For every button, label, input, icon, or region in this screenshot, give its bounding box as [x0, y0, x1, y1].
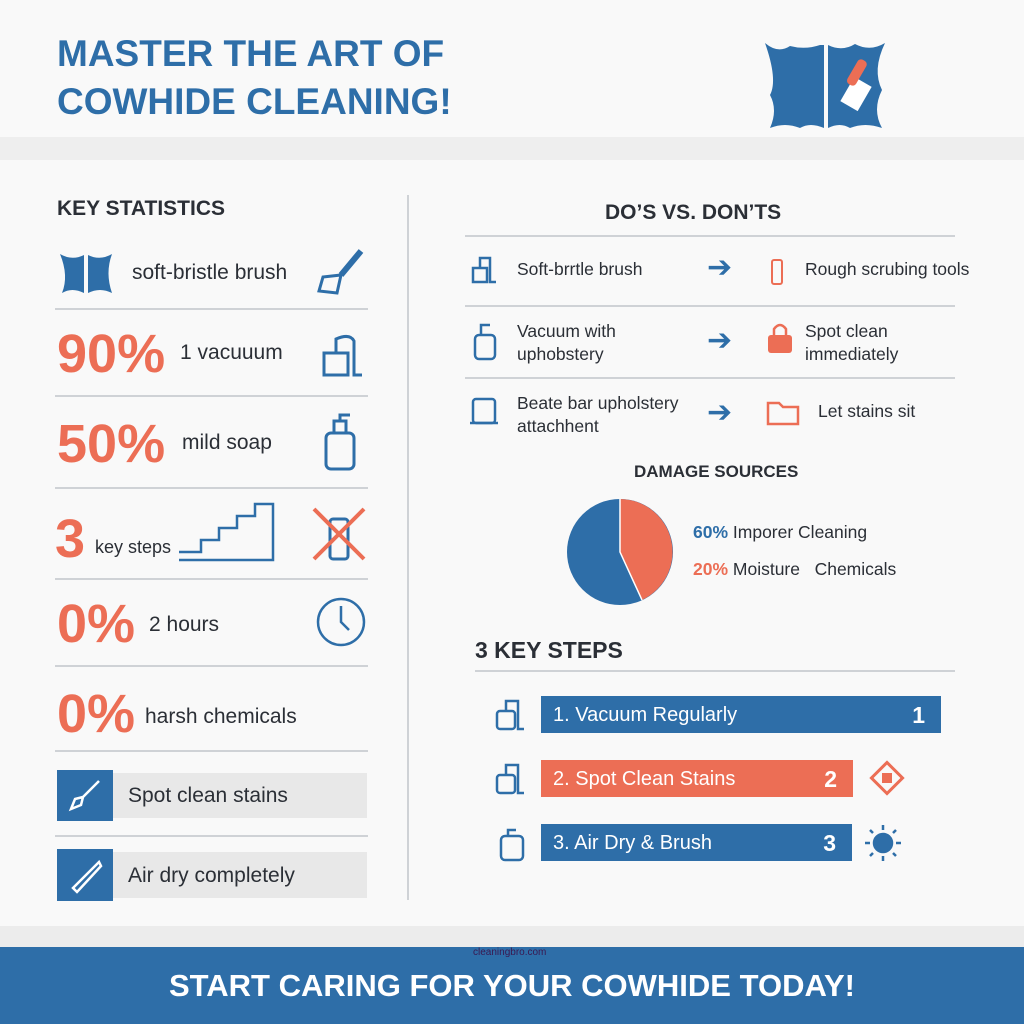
- panel: do's vs don'ts: [465, 201, 969, 436]
- watermark: cleaningbro.com: [473, 947, 546, 958]
- pie chart: [567, 499, 673, 605]
- row 1: [60, 249, 364, 295]
- row 2: Vacuum with: [517, 321, 616, 341]
- row 3: 50%: [57, 414, 165, 474]
- row 4: key steps: [95, 537, 171, 557]
- pie legend: 60% Imporer Cleaning: [693, 522, 867, 542]
- box: air dry completely: [57, 852, 367, 898]
- row 3: ➔: [707, 396, 732, 429]
- header title: [57, 33, 452, 122]
- footer text: START CARING FOR YOUR COWHIDE TODAY!: [169, 968, 855, 1003]
- step 3: [500, 824, 901, 862]
- row 2: immediately: [805, 344, 898, 364]
- step 1: [496, 696, 941, 733]
- row 2: 1 vacuuum: [180, 341, 283, 364]
- step 2: [496, 760, 905, 797]
- row 6: harsh chemicals: [145, 705, 297, 728]
- row 2: ➔: [707, 324, 732, 357]
- step 1: 1. Vacuum Regularly: [553, 704, 737, 726]
- pie legend: 20% Moisture Chemicals: [693, 559, 896, 579]
- gray band: [0, 137, 1024, 160]
- row 3: mild soap: [182, 431, 272, 454]
- row 2: 90%: [57, 324, 165, 384]
- row 5: 2 hours: [149, 613, 219, 636]
- heading 3 key steps: 3 KEY STEPS: [475, 637, 623, 663]
- row 3: [470, 393, 916, 436]
- row 3: Beate bar upholstery: [517, 393, 678, 413]
- step 2: 2. Spot Clean Stains: [553, 768, 735, 790]
- row 2: Spot clean: [805, 321, 888, 341]
- icon: cowhide with brush: [765, 43, 885, 128]
- box: spot clean stains: [57, 773, 367, 818]
- header title: COWHIDE CLEANING!: [57, 81, 452, 122]
- divider: [407, 195, 408, 900]
- damage sources heading: DAMAGE SOURCES: [634, 462, 798, 481]
- row 1: Rough scrubing tools: [805, 259, 969, 279]
- pie legend: [693, 522, 896, 579]
- row 3: attachhent: [517, 416, 599, 436]
- step 3: 3: [823, 830, 836, 856]
- box: air dry completely: Air dry completely: [128, 864, 295, 887]
- row 6: [57, 684, 297, 744]
- row 3: [57, 414, 356, 474]
- panel: key statistics: [55, 197, 368, 901]
- row 2: [474, 321, 898, 364]
- step 1: 1: [912, 702, 925, 728]
- footer banner: [0, 947, 1024, 1024]
- row 1: soft-bristle brush: [132, 261, 287, 284]
- row 1: ➔: [707, 251, 732, 284]
- row 2: uphobstery: [517, 344, 604, 364]
- row 4: 3: [55, 509, 85, 569]
- row 2: [57, 324, 362, 384]
- row 3: Let stains sit: [818, 401, 915, 421]
- step 2: 2: [824, 766, 837, 792]
- row 5: [57, 594, 366, 654]
- footer gray band: [0, 926, 1024, 947]
- heading key statistics: KEY STATISTICS: [57, 197, 225, 220]
- row 1: Soft-brrtle brush: [517, 259, 642, 279]
- box: spot clean stains: Spot clean stains: [128, 784, 288, 807]
- header title: MASTER THE ART OF: [57, 33, 444, 74]
- heading dos donts: DO’S VS. DON’TS: [605, 201, 781, 224]
- row 6: 0%: [57, 684, 135, 744]
- row 1: [472, 251, 969, 285]
- row 4: [55, 502, 366, 569]
- row 5: 0%: [57, 594, 135, 654]
- step 3: 3. Air Dry & Brush: [553, 832, 712, 854]
